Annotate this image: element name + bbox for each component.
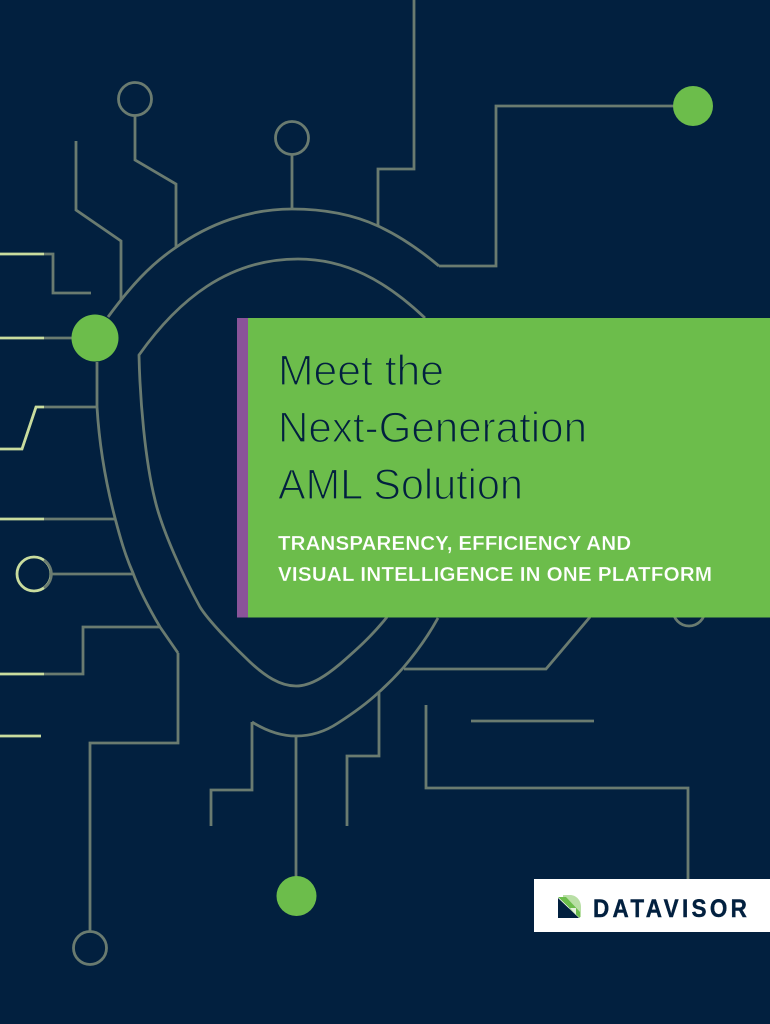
subtitle: [278, 532, 712, 586]
filled node: left: [72, 314, 118, 362]
open node: left, highlighted: [17, 557, 51, 591]
logo wordmark: DATAVISOR: [593, 895, 747, 923]
title: [278, 347, 587, 509]
subtitle: VISUAL INTELLIGENCE IN ONE PLATFORM: [278, 563, 712, 586]
circuit head outline: [97, 209, 439, 736]
circuit traces: [44, 0, 688, 931]
logo plate: [534, 879, 770, 932]
open node: upper left: [118, 82, 152, 116]
logo icon: [558, 895, 581, 918]
open node: top centre: [276, 122, 308, 154]
open node: bottom left: [74, 932, 106, 964]
title: Next-Generation: [278, 404, 587, 452]
highlighted trace ends: [0, 254, 44, 736]
outer contour: bottom: [252, 618, 438, 736]
subtitle: TRANSPARENCY, EFFICIENCY AND: [278, 532, 631, 555]
inner contour: [139, 259, 425, 686]
open node: right, behind panel: [673, 594, 705, 626]
purple accent bar: [237, 318, 248, 618]
outer contour: top: [108, 209, 439, 317]
green title panel: [248, 318, 770, 618]
filled node: bottom: [276, 876, 316, 916]
filled node: top right: [673, 86, 713, 126]
title: AML Solution: [278, 461, 523, 509]
outer contour: left side: [97, 362, 178, 653]
title: Meet the: [278, 347, 444, 395]
